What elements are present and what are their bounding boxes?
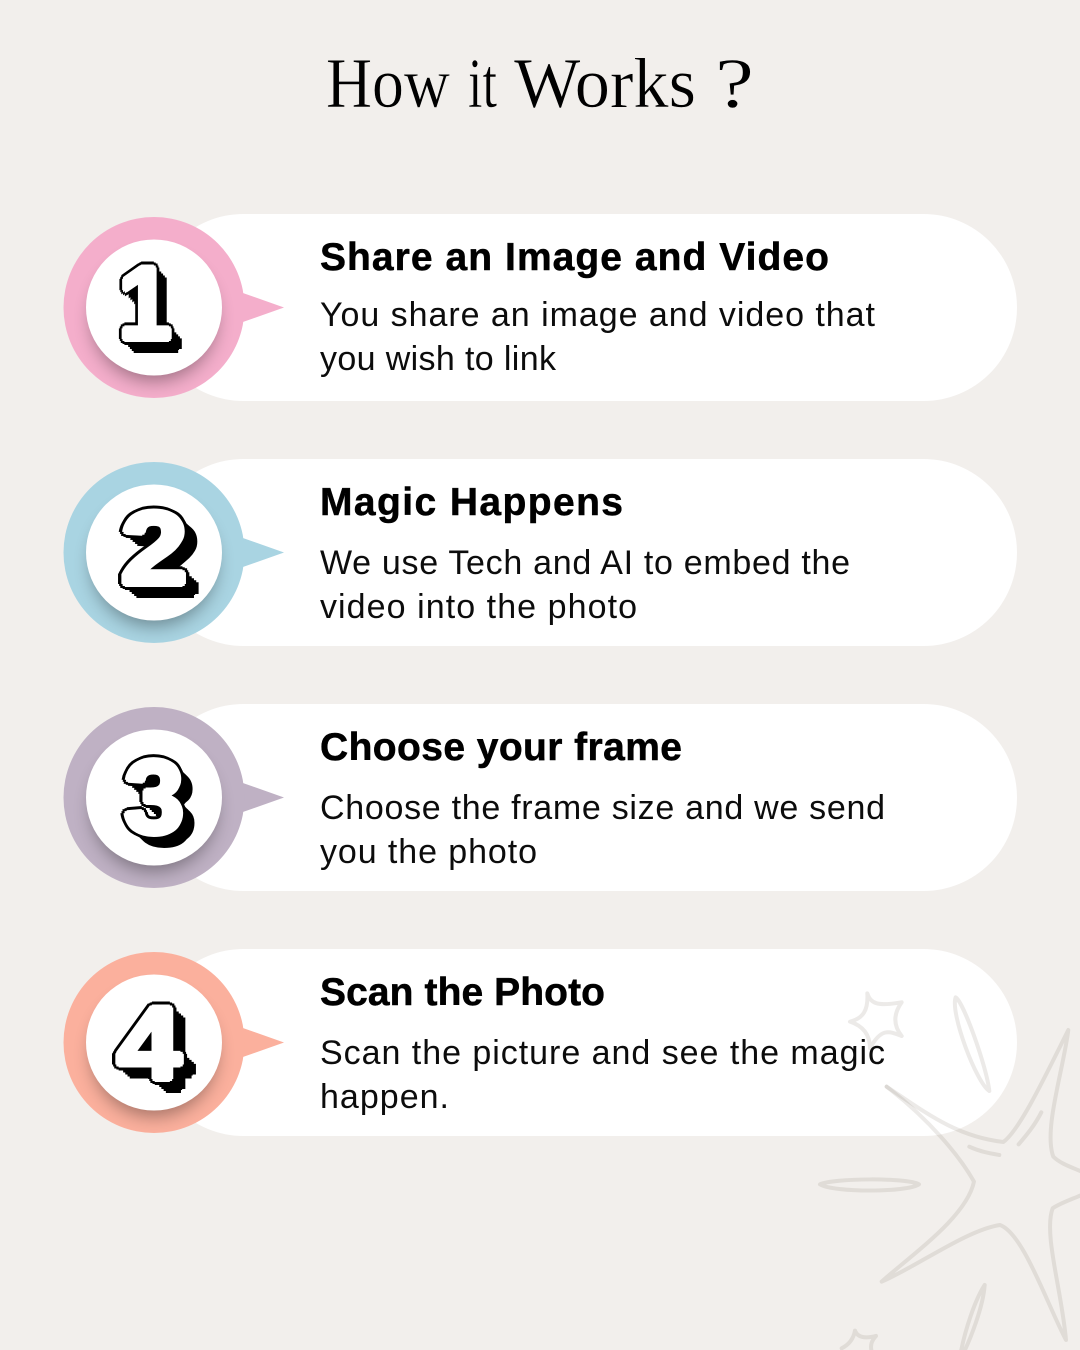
body 4: happen. bbox=[320, 1078, 449, 1116]
number 1: 1 bbox=[118, 246, 172, 362]
body 4 bbox=[320, 1034, 885, 1116]
body 1: You share an image and video that bbox=[320, 296, 876, 334]
body 3: Choose the frame size and we send bbox=[320, 789, 885, 827]
title bbox=[326, 45, 754, 123]
number 2: 2 bbox=[121, 491, 187, 607]
card 3 bbox=[150, 704, 1017, 891]
heading 1: Share an Image and Video bbox=[320, 236, 829, 279]
title: Works bbox=[514, 45, 696, 123]
number 4: 4 bbox=[117, 986, 181, 1102]
step 3 panel bbox=[64, 704, 1017, 891]
card 1 bbox=[150, 214, 1017, 401]
heading 2: Magic Happens bbox=[320, 481, 623, 524]
badge 3 bbox=[64, 707, 284, 888]
body 1: you wish to link bbox=[320, 340, 557, 378]
body 4: Scan the picture and see the magic bbox=[320, 1034, 885, 1072]
number 3: 3 bbox=[124, 740, 184, 856]
title: How bbox=[326, 45, 450, 123]
card 2 bbox=[150, 459, 1017, 646]
step 2 panel bbox=[64, 459, 1017, 646]
title: it bbox=[468, 45, 497, 123]
body 2 bbox=[320, 544, 850, 626]
body 2: We use Tech and AI to embed the bbox=[320, 544, 850, 582]
body 1 bbox=[320, 296, 876, 378]
heading 3: Choose your frame bbox=[320, 726, 682, 769]
badge 2 bbox=[64, 462, 284, 643]
body 2: video into the photo bbox=[320, 588, 637, 626]
decoration: sparkle stars bbox=[820, 993, 1080, 1350]
heading 4: Scan the Photo bbox=[320, 971, 605, 1014]
body 3 bbox=[320, 789, 885, 871]
step 1 panel bbox=[64, 214, 1017, 401]
body 3: you the photo bbox=[320, 833, 537, 871]
card 4 bbox=[150, 949, 1017, 1136]
badge 1 bbox=[64, 217, 284, 398]
badge 4 bbox=[64, 952, 284, 1133]
step 4 panel bbox=[64, 949, 1017, 1136]
title: ? bbox=[715, 45, 754, 123]
